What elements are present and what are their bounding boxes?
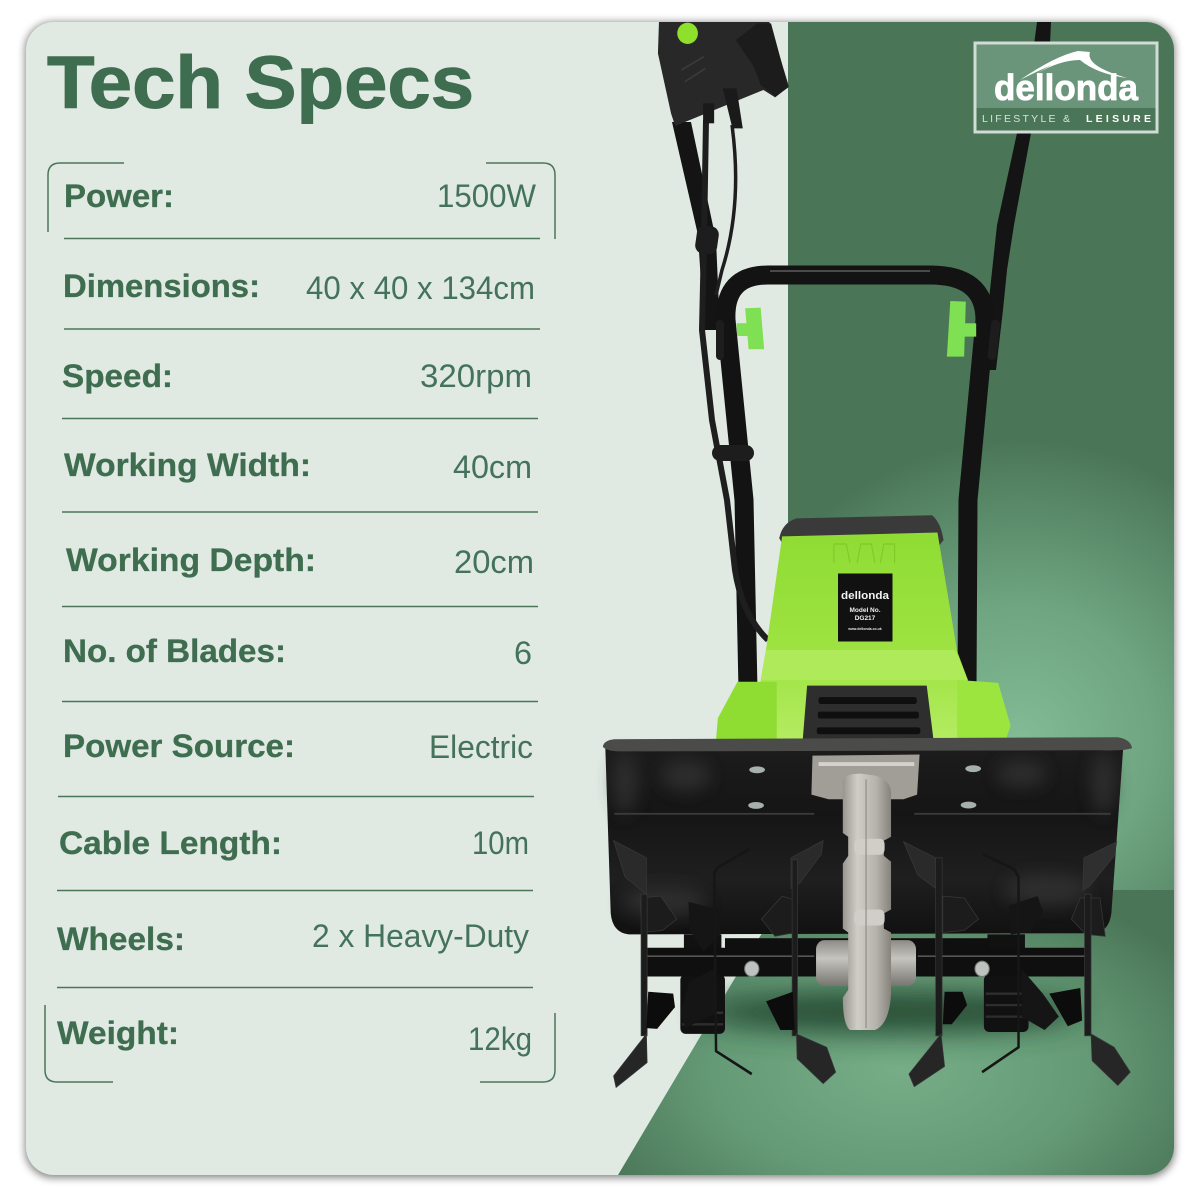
deck body (605, 749, 1123, 934)
row: power source: Electric (429, 729, 533, 765)
logo tagline bold: LEISURE (1086, 113, 1151, 125)
floor shadow under machine (700, 990, 1080, 1034)
row: cable length (59, 825, 529, 861)
deck lip (603, 737, 1132, 751)
lower housing highlight (761, 650, 968, 680)
specification table (45, 163, 555, 1082)
title: Tech Specs (47, 41, 474, 124)
blade fork 5 (982, 854, 1059, 1072)
model label: dellonda (841, 590, 890, 602)
right wing (957, 680, 1011, 741)
row: power: Power: (64, 178, 174, 214)
gearbox plate channel (819, 759, 914, 769)
vent grille (802, 686, 934, 743)
deck sheen (612, 753, 1116, 917)
row: number of blades: No. of Blades: (63, 633, 286, 669)
bracket: bottom corners (45, 1005, 555, 1082)
model label: DG217 (855, 615, 876, 622)
gearbox seam (865, 779, 868, 1028)
row: number of blades (63, 633, 532, 671)
row: power: 1500W (437, 178, 537, 214)
gearbox hub (816, 940, 916, 986)
row: power (64, 178, 537, 214)
right handle bar (990, 22, 1051, 370)
adjustment knobs (737, 301, 976, 357)
blade fork 6 (1049, 842, 1130, 1086)
gearbox bosses (854, 839, 885, 926)
axle (643, 938, 1089, 976)
model label: Model No. (849, 607, 881, 614)
lower machine body (603, 515, 1132, 1087)
logo tagline: LIFESTYLE & (982, 113, 1070, 125)
model label (838, 574, 892, 642)
bracket: top corners (48, 163, 555, 239)
row: working width (64, 447, 532, 485)
logo lower band (976, 108, 1156, 130)
row: working depth: 20cm (454, 544, 534, 580)
deck bolts (748, 765, 981, 809)
wheels (680, 934, 1029, 1034)
row: cable length: Cable Length: (59, 825, 282, 861)
model label: www.dellonda.co.uk (847, 627, 882, 631)
row: wheels: Wheels: (57, 921, 185, 957)
row: dimensions: 40 x 40 x 134cm (306, 270, 535, 306)
row: dimensions (63, 268, 535, 306)
panel: dark green backdrop wall (788, 22, 1174, 890)
row: weight: 12kg (468, 1021, 532, 1057)
row: cable length: 10m (472, 825, 529, 861)
row: power source (63, 728, 533, 765)
gearbox mounting plate (811, 754, 920, 799)
row: wheels: 2 x Heavy-Duty (312, 918, 529, 954)
row: working width: Working Width: (64, 447, 311, 483)
row: wheels (57, 918, 529, 957)
gearbox column (843, 774, 891, 1030)
row: working width: 40cm (453, 449, 532, 485)
row: speed: 320rpm (420, 358, 532, 394)
axle sheen (648, 955, 1084, 957)
logo wave (1020, 51, 1127, 80)
housing embossing (834, 544, 895, 563)
left handle bar (672, 122, 720, 330)
blade fork 1 (614, 841, 677, 1087)
row: speed: Speed: (62, 358, 173, 394)
folding lower frame (726, 271, 985, 690)
power cables (702, 120, 768, 640)
motor housing (761, 533, 968, 741)
logo: dellonda (975, 43, 1157, 132)
left wing (716, 682, 777, 741)
wheel tread (682, 994, 1027, 1024)
row: number of blades: 6 (514, 635, 532, 671)
row: dimensions: Dimensions: (63, 268, 260, 304)
row: speed (62, 358, 532, 394)
axle bolts (745, 961, 989, 976)
cable clips (694, 225, 1001, 461)
motor cover top (779, 515, 944, 545)
row: working depth (66, 542, 534, 580)
row: weight: Weight: (57, 1015, 179, 1051)
blade fork 2 (680, 849, 752, 1074)
logo wordmark: dellonda (994, 67, 1139, 108)
row: weight (57, 1015, 532, 1057)
panel: green floor (618, 890, 1174, 1175)
row: working depth: Working Depth: (66, 542, 316, 578)
deck crease (614, 812, 1111, 815)
blade fork 4 (904, 842, 979, 1087)
control box switch (658, 22, 789, 128)
row: power source: Power Source: (63, 728, 295, 764)
logo plate (975, 43, 1157, 132)
product illustration: electric tiller (603, 22, 1132, 1087)
blade fork 3 (761, 841, 836, 1084)
vent slats (817, 697, 920, 734)
